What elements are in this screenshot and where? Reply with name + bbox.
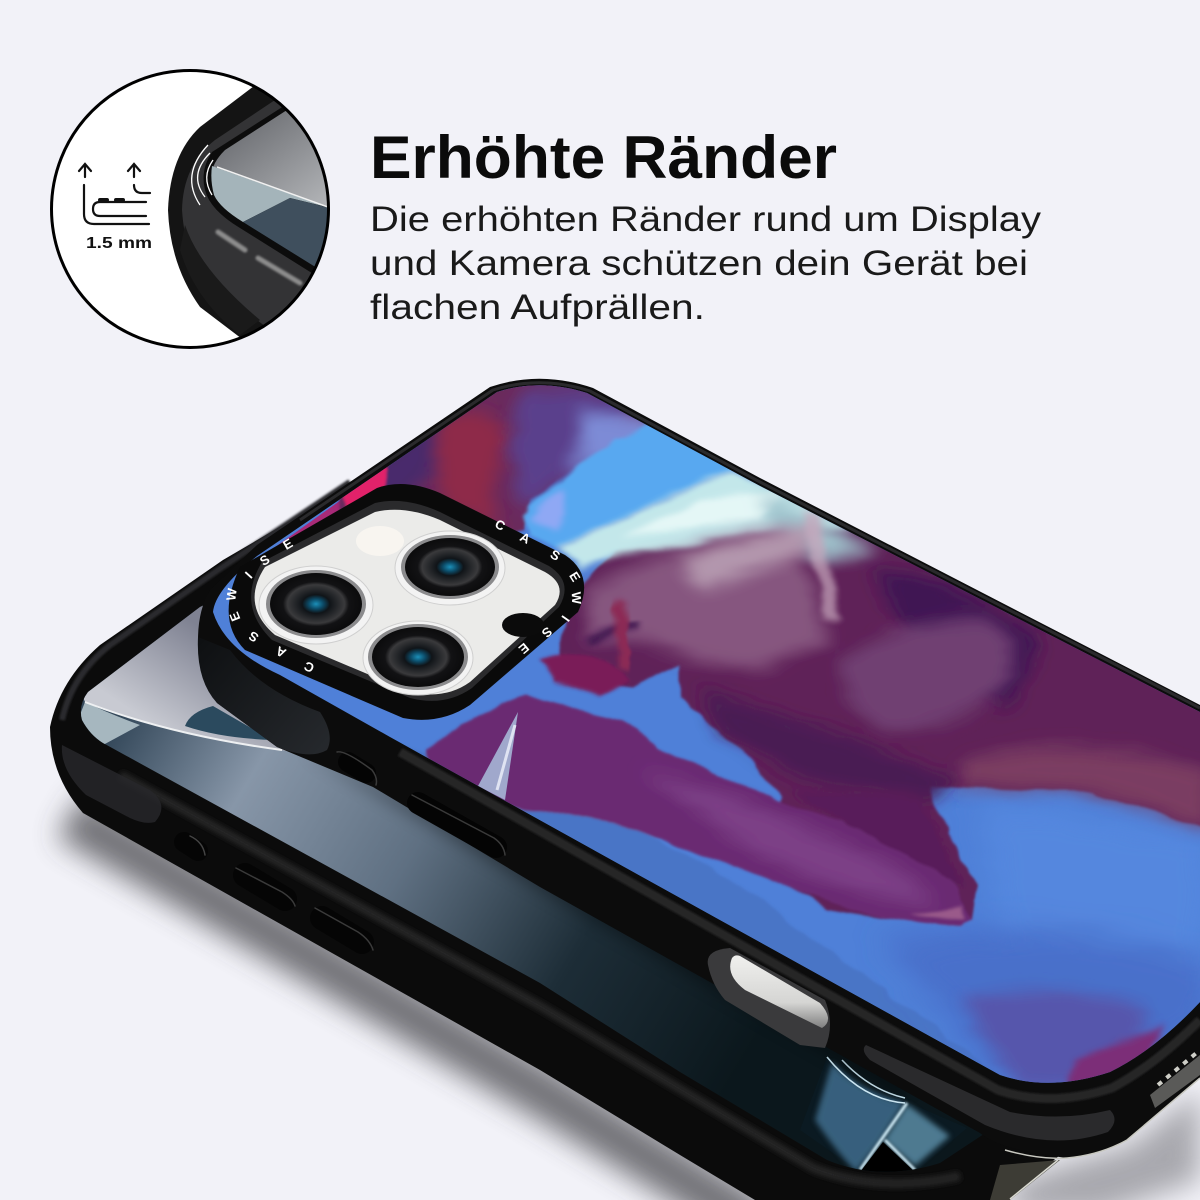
camera island xyxy=(223,484,584,720)
inset: glass dark xyxy=(243,198,330,268)
shadow cast by top phone onto the screen xyxy=(300,750,920,1095)
camera: CASEWISE ring lettering left: E xyxy=(280,535,296,553)
top phone: top rim highlight xyxy=(300,383,1200,708)
camera: white module xyxy=(255,510,560,694)
screen: lower sunburst xyxy=(811,1056,954,1172)
top phone: right port xyxy=(1150,1055,1200,1108)
art: mauve chest xyxy=(585,530,830,670)
screen: dark blob xyxy=(185,706,272,740)
art: warm lower body xyxy=(960,747,1200,830)
inset: case corner xyxy=(168,87,274,337)
body text: und Kamera schützen dein Gerät bei xyxy=(370,244,1028,283)
inset: translucent bumper xyxy=(182,101,312,325)
art: dark neck xyxy=(700,690,960,800)
inset: highlights xyxy=(218,232,300,283)
art: large purple body xyxy=(555,490,1200,927)
camera: inner bevel xyxy=(251,501,565,701)
camera: CASEWISE ring lettering right: S xyxy=(548,546,563,564)
drop shadow under phones xyxy=(70,816,1200,1200)
screen: pale wedge xyxy=(76,702,140,745)
camera: CASEWISE ring lettering left: C xyxy=(301,658,317,676)
body text xyxy=(370,200,1042,327)
art: dark top-left mass xyxy=(338,385,646,533)
art: lower blue field xyxy=(400,745,1000,1075)
camera: CASEWISE ring lettering left: I xyxy=(242,569,255,581)
top phone: camera lobe xyxy=(198,637,330,754)
art: dark mass right of chest xyxy=(870,570,1040,710)
art: purple swirl xyxy=(511,390,640,510)
camera: CASEWISE ring lettering right: E xyxy=(566,569,584,585)
lens: top right xyxy=(395,531,505,605)
bottom phone: side highlight xyxy=(120,775,960,1183)
camera: CASEWISE ring lettering left: W xyxy=(223,587,240,601)
inset: glass pale xyxy=(211,166,327,222)
camera: CASEWISE ring lettering left: E xyxy=(226,610,243,624)
screen: white curve xyxy=(85,702,282,750)
silver edge at lower right xyxy=(990,1160,1060,1200)
camera: CASEWISE ring lettering left: S xyxy=(246,628,261,645)
camera: flash xyxy=(356,526,404,556)
camera: CASEWISE ring lettering right: C xyxy=(492,516,508,534)
body text: Die erhöhten Ränder rund um Display xyxy=(370,200,1042,239)
lens: bottom xyxy=(363,621,473,695)
lens: left xyxy=(259,566,373,644)
inset: black inner rim xyxy=(204,108,324,272)
top phone: switch and volume buttons xyxy=(337,752,505,855)
top phone: case body xyxy=(198,379,1200,1158)
art: pale cyan highlight xyxy=(557,472,850,570)
artwork on the back of the top phone xyxy=(190,370,1200,1110)
top phone: lower corner lobe xyxy=(864,1045,1115,1141)
bottom phone: screen xyxy=(80,606,982,1172)
art: horn xyxy=(478,712,518,800)
top phone: inner rim highlight xyxy=(400,752,1200,1099)
camera: outer ring xyxy=(229,484,584,720)
camera: CASEWISE ring lettering left: S xyxy=(257,551,273,569)
inset: glass white line xyxy=(217,167,328,207)
art: upper-left sliver beside the ring xyxy=(276,465,390,546)
body text: flachen Aufprällen. xyxy=(370,288,705,327)
camera: CASEWISE ring lettering right: W xyxy=(569,591,584,605)
inset: height diagram icon xyxy=(79,164,150,224)
art: corner purple wash xyxy=(960,990,1150,1090)
inset: 1.5 mm label: 1.5 mm xyxy=(86,235,152,252)
top phone: silver outer edge xyxy=(1005,1078,1200,1158)
art: dark mouth xyxy=(540,653,630,695)
bottom phone: top band highlight xyxy=(62,482,350,720)
art: sky blue xyxy=(523,418,740,547)
inset circle: raised edge detail xyxy=(51,70,340,348)
camera: CASEWISE ring lettering right: E xyxy=(515,640,532,657)
camera: CASEWISE ring lettering left xyxy=(223,535,317,676)
bottom phone: translucent corner lobe xyxy=(62,745,161,823)
camera: CASEWISE ring lettering right: I xyxy=(559,613,573,624)
camera: CASEWISE ring lettering right xyxy=(492,516,584,657)
camera: microphone hole xyxy=(502,613,544,637)
screen: grey reflection xyxy=(84,606,286,751)
inset: impact arcs xyxy=(192,145,213,205)
camera: CASEWISE ring lettering right: S xyxy=(539,624,555,641)
bottom phone: side buttons xyxy=(184,836,373,950)
top phone: silver button xyxy=(708,948,830,1048)
art: mauve oval xyxy=(840,618,1013,730)
camera: CASEWISE ring lettering left: A xyxy=(273,643,289,661)
camera: CASEWISE ring lettering right: A xyxy=(517,529,533,547)
inset: glass grey xyxy=(214,111,327,206)
bottom phone: case body xyxy=(50,480,1060,1200)
art: arm xyxy=(428,696,972,927)
title: Erhöhte Ränder xyxy=(370,124,837,191)
